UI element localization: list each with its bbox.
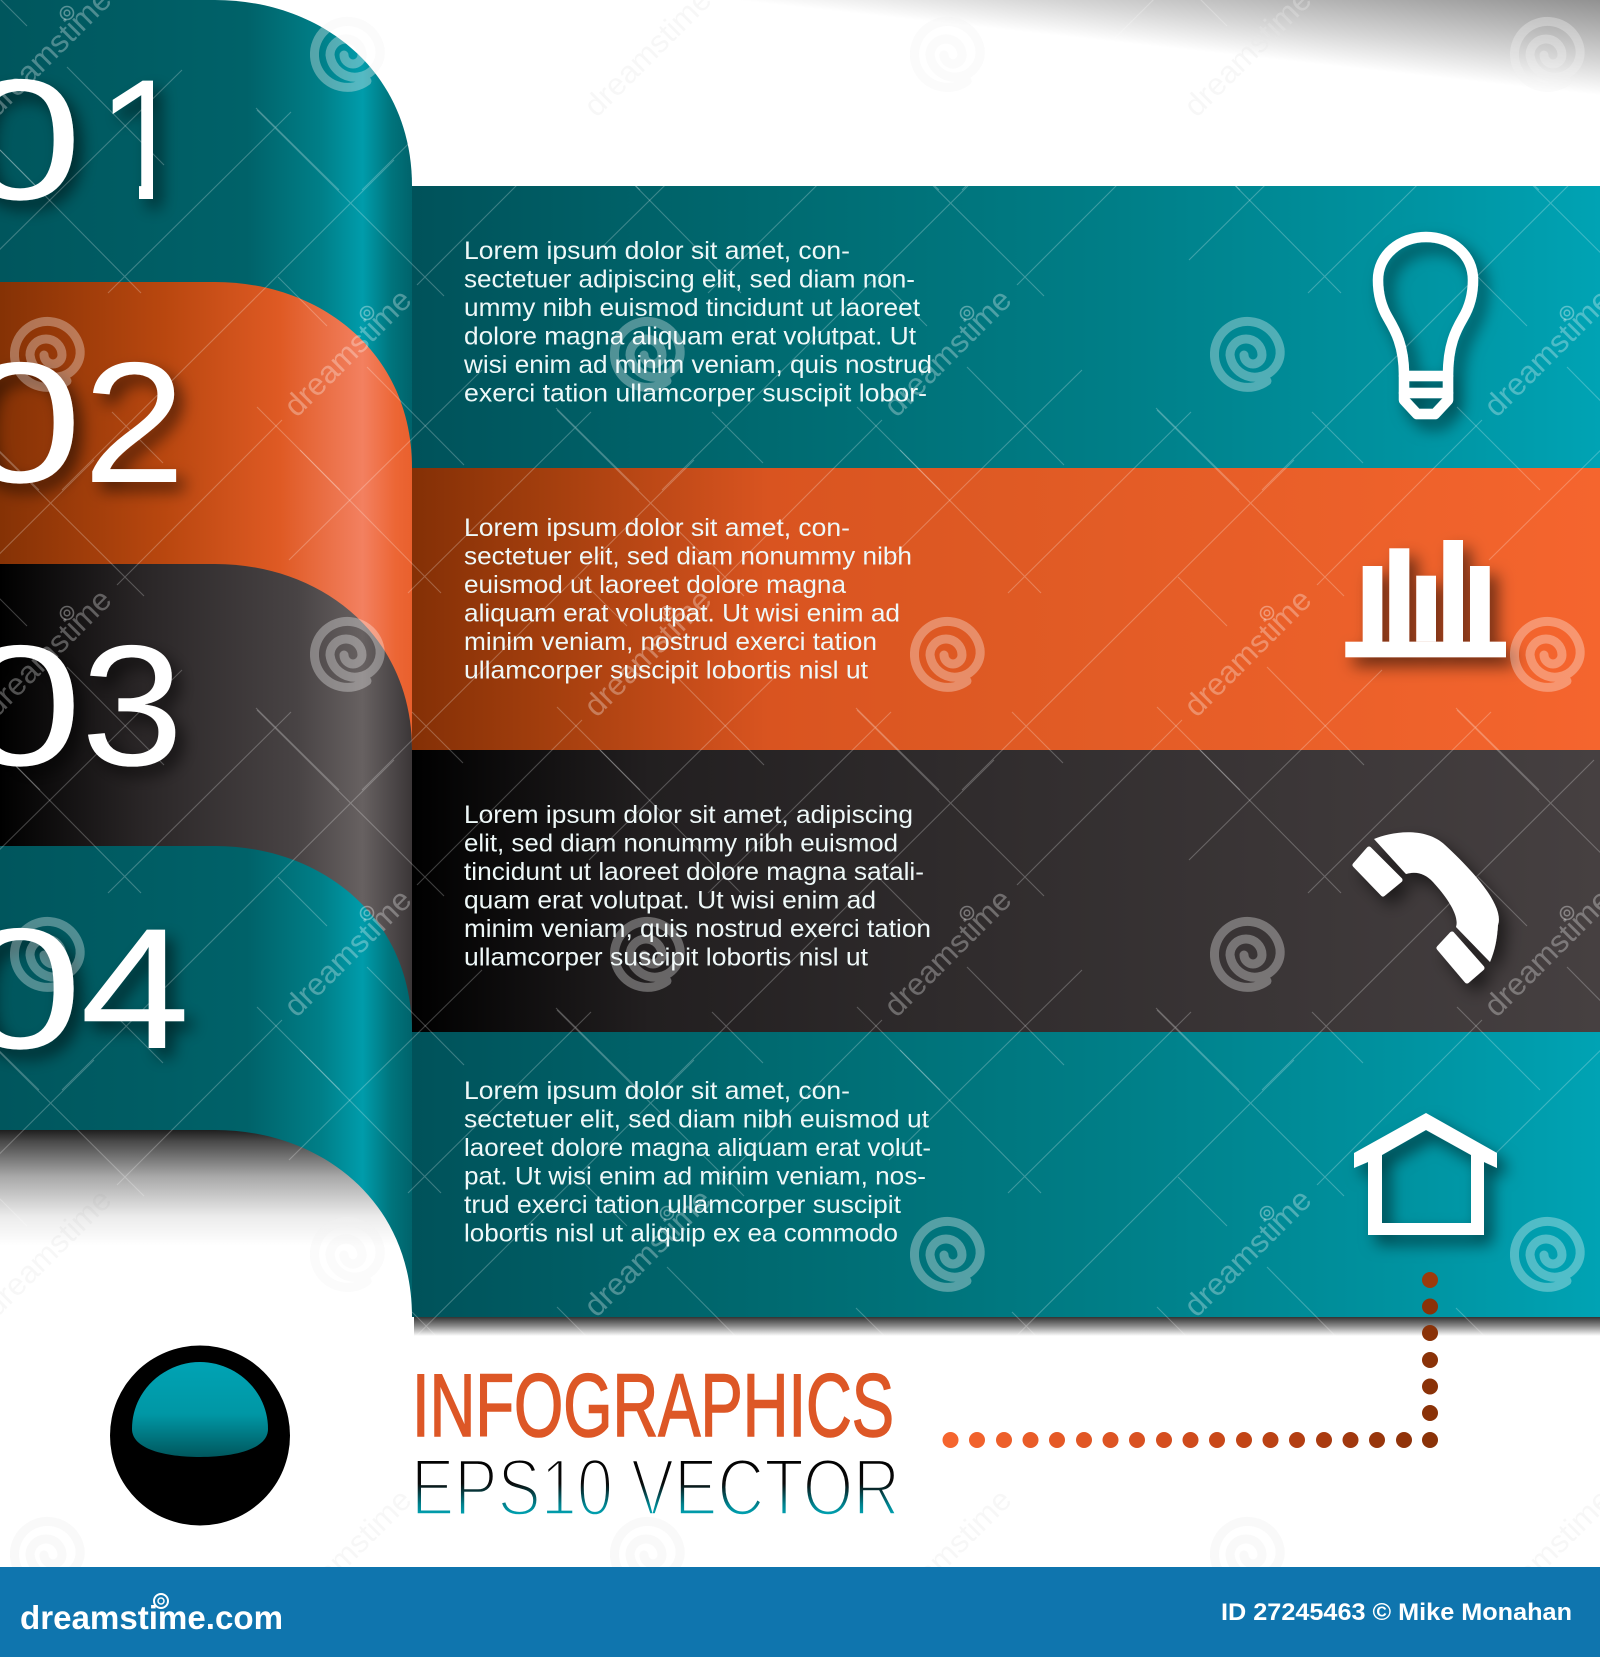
title: INFOGRAPHICS: INFOGRAPHICS [412, 1355, 894, 1455]
text block 4: sectetuer elit, sed diam nibh euismod ut [464, 1106, 929, 1134]
text block 2: sectetuer elit, sed diam nonummy nibh [464, 542, 912, 570]
number 04 [0, 893, 190, 1085]
band 4: teal [412, 1032, 1600, 1317]
text block 1: dolore magna aliquam erat volutpat. Ut [464, 322, 916, 350]
text block 4: Lorem ipsum dolor sit amet, con- [464, 1077, 850, 1105]
text block 4: pat. Ut wisi enim ad minim veniam, nos- [464, 1162, 926, 1190]
watermark text: dreamstime [277, 282, 418, 423]
watermark text: dreamstime [277, 882, 418, 1023]
icon: bar chart [1345, 540, 1506, 657]
band 1: teal [412, 186, 1600, 468]
number 03: 3 [81, 610, 183, 802]
number 01 [0, 78, 169, 217]
watermark text: dreamstime [577, 1182, 718, 1323]
watermark text: dreamstime [877, 1482, 1018, 1623]
watermark copyright marks [60, 6, 1574, 1220]
band 2: orange [412, 468, 1600, 750]
text block 3: elit, sed diam nonummy nibh euismod [464, 830, 898, 858]
text block 2: ullamcorper suscipit lobortis nisl ut [464, 656, 868, 684]
watermark text: dreamstime [877, 282, 1018, 423]
text block 4: lobortis nisl ut aliquip ex ea commodo [464, 1220, 898, 1248]
footer bar [0, 1567, 1600, 1657]
text block 3 [464, 801, 931, 972]
text block 1 [463, 237, 932, 408]
text block 2 [464, 514, 912, 684]
band 3: charcoal [412, 750, 1600, 1032]
footer logo text: dreamstime.com [20, 1599, 283, 1636]
text block 1: exerci tation ullamcorper suscipit lobor- [464, 380, 927, 408]
shadow under ribbons [0, 1130, 414, 1246]
text block 3: Lorem ipsum dolor sit amet, adipiscing [464, 801, 913, 829]
ribbon 2 orange [0, 282, 412, 760]
top right shadow [0, 0, 1600, 186]
ribbon 1 teal [0, 0, 412, 480]
shadow under bands [414, 1316, 1600, 1336]
ribbon 4 teal [0, 846, 412, 1317]
text block 1: wisi enim ad minim veniam, quis nostrud [463, 351, 932, 379]
text block 3: ullamcorper suscipit lobortis nisl ut [464, 944, 868, 972]
watermark text: dreamstime [877, 882, 1018, 1023]
text block 4 [464, 1077, 931, 1248]
text block 2: aliquam erat volutpat. Ut wisi enim ad [464, 600, 900, 628]
text block 3: tincidunt ut laoreet dolore magna satali- [464, 858, 924, 886]
dotted connector [942, 1272, 1438, 1448]
watermark text: dreamstime [277, 1482, 418, 1623]
logo: black sphere with teal dome [110, 1346, 290, 1526]
ribbon 3 charcoal [0, 564, 412, 1040]
number 03 [0, 610, 183, 802]
text block 1: sectetuer adipiscing elit, sed diam non- [464, 266, 915, 294]
text block 3: quam erat volutpat. Ut wisi enim ad [464, 886, 876, 914]
text block 4: laoreet dolore magna aliquam erat volut- [464, 1134, 931, 1162]
text block 1: ummy nibh euismod tincidunt ut laoreet [464, 294, 920, 322]
icon: light bulb [1378, 237, 1473, 414]
text block 2: minim veniam, nostrud exerci tation [464, 628, 877, 656]
number 02 [0, 327, 185, 519]
number 01: 1 [95, 44, 197, 236]
watermark text: dreamstime [577, 582, 718, 723]
icon: telephone [1355, 832, 1499, 981]
number 04: 4 [80, 893, 190, 1085]
text block 1: Lorem ipsum dolor sit amet, con- [464, 237, 850, 265]
number 02: 2 [83, 327, 185, 519]
watermark text: dreamstime [1177, 1182, 1318, 1323]
text block 3: minim veniam, quis nostrud exerci tation [464, 915, 931, 943]
text block 4: trud exerci tation ullamcorper suscipit [464, 1191, 901, 1219]
subtitle: EPS10 VECTOR: EPS10 VECTOR [411, 1443, 900, 1533]
watermark text: dreamstime [1177, 582, 1318, 723]
text block 2: euismod ut laoreet dolore magna [464, 571, 846, 599]
footer credit: ID 27245463 © Mike Monahan [1221, 1599, 1572, 1626]
text block 2: Lorem ipsum dolor sit amet, con- [464, 514, 850, 542]
icon: house [1354, 1113, 1497, 1235]
